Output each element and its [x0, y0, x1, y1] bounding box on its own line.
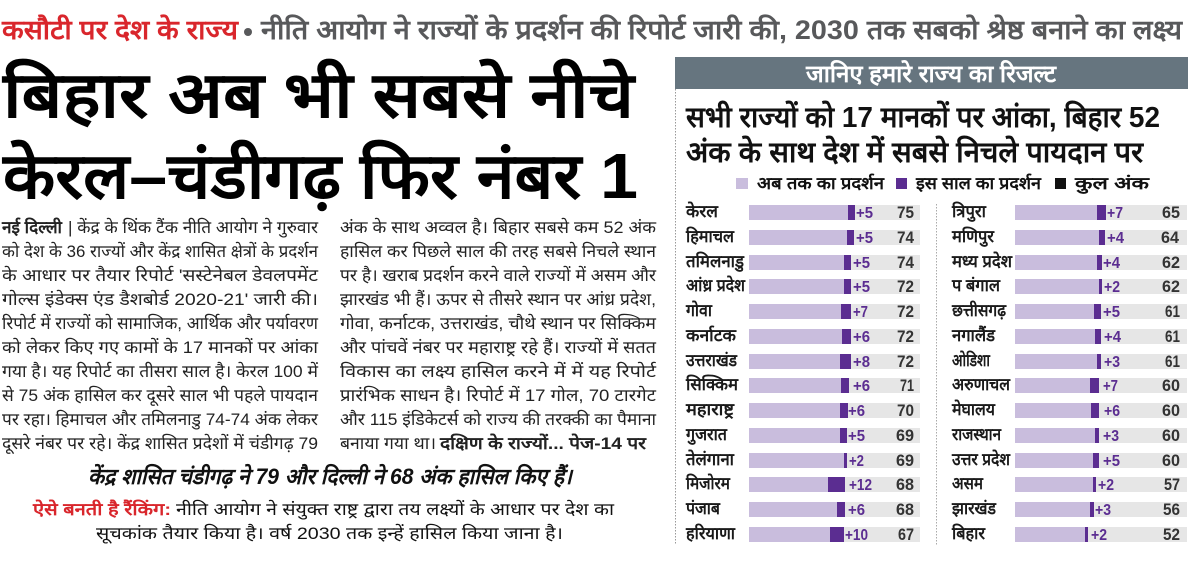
row: Punjab: 68 [896, 501, 914, 519]
panel header: state results: जानिए हमारे राज्य का रिजल्ट [805, 60, 1057, 88]
ranking note: ऐसे बनती है रैंकिंग: [32, 499, 171, 519]
row: Haryana: हरियाणा [685, 523, 736, 543]
row: Jharkhand: 56 [1163, 501, 1180, 519]
row: Andhra Pradesh: आंध्र प्रदेश [686, 275, 746, 295]
row: Maharashtra: महाराष्ट्र [685, 400, 735, 419]
row: Sikkim: सिक्किम [685, 374, 739, 394]
row: Mizoram: +12 [849, 477, 872, 494]
row: Uttar Pradesh: 60 [1162, 452, 1180, 470]
row: Haryana: +10 [845, 527, 868, 544]
row: Goa: 72 [897, 303, 914, 321]
row: Uttar Pradesh [951, 449, 1187, 470]
row: Odisha: 61 [1165, 353, 1180, 371]
panel header: state results [675, 57, 1188, 89]
row: West Bengal: +2 [1104, 279, 1120, 296]
row: Assam [952, 474, 1187, 494]
article body: right column: पर है। खराब प्रदर्शन करने वाले राज्यों में असम और [340, 265, 657, 285]
row: Maharashtra: 70 [897, 402, 914, 420]
article body: right column: दक्षिण के राज्यों... पेज-14 पर [439, 433, 647, 453]
row: Chhattisgarh [951, 300, 1187, 321]
row: Punjab: पंजाब [685, 499, 721, 518]
row: Himachal: हिमाचल [685, 226, 735, 246]
row: Maharashtra: +6 [848, 403, 865, 420]
row: Arunachal: अरुणाचल [952, 375, 1011, 394]
row: Haryana: 67 [898, 526, 914, 544]
article body: left column: से 75 अंक हासिल कर दूसरे साल भी पहले पायदान [2, 385, 319, 406]
article body: left column: रिपोर्ट में राज्यों को सामाजिक, आर्थिक और पर्यावरण [2, 313, 319, 333]
article body: right column: विकास का लक्ष्य हासिल करने में में यह रिपोर्ट [340, 361, 657, 381]
article body: left column: | केंद्र के थिंक टैंक नीति आयोग ने गुरुवार [68, 217, 319, 238]
row: Goa: +7 [853, 304, 868, 321]
row: Uttarakhand: 72 [897, 353, 914, 371]
article body: right column: अंक के साथ अव्वल है। बिहार सबसे कम 52 अंक [340, 217, 657, 237]
row: Assam: असम [952, 474, 984, 493]
row: Tripura: +7 [1107, 205, 1123, 222]
row: Nagaland [951, 325, 1187, 346]
row: Uttarakhand: उत्तराखंड [685, 351, 738, 370]
row: Telangana: तेलंगाना [685, 449, 735, 469]
row: Madhya Pradesh [951, 251, 1187, 272]
row: Gujarat [685, 425, 920, 445]
row: Sikkim: 71 [900, 377, 914, 395]
top strap line: कसौटी पर देश के राज्य [1, 14, 239, 45]
bar chart: right column [951, 201, 1187, 544]
row: Sikkim [685, 374, 920, 395]
legend: अब तक का प्रदर्शन [757, 173, 885, 193]
row: Himachal: 74 [897, 229, 915, 247]
row: Meghalaya [951, 399, 1187, 420]
article body: left column: को देश के 36 राज्यों और केंद्र शासित क्षेत्रों के प्रदर्शन [2, 241, 319, 261]
row: Arunachal [952, 375, 1187, 395]
article body: right column: बनाया गया था। [340, 434, 436, 453]
row: Arunachal: +7 [1103, 378, 1118, 395]
row: Jharkhand: झारखंड [951, 499, 997, 518]
article body: left column: दूसरे नंबर पर रहे। केंद्र शासित प्रदेशों में चंडीगढ़ 79 [2, 433, 318, 454]
row: Chhattisgarh: 61 [1165, 303, 1180, 321]
article body: left column: पर रहा। हिमाचल और तमिलनाडु 74-74 अंक लेकर [2, 409, 319, 430]
row: Uttar Pradesh: +5 [1103, 453, 1120, 470]
ranking note: नीति आयोग ने संयुक्त राष्ट्र द्वारा तय लक्ष्यों के आधार पर देश का [176, 499, 615, 520]
row: Gujarat: 69 [896, 427, 914, 445]
row: Andhra Pradesh: +5 [853, 279, 870, 296]
row: Jharkhand [951, 499, 1187, 519]
row: Sikkim: +6 [853, 378, 870, 395]
row: Mizoram [685, 473, 920, 494]
row: Tripura: त्रिपुरा [951, 201, 987, 222]
row: Gujarat: +5 [848, 428, 865, 445]
row: Manipur [951, 226, 1187, 247]
row: Punjab: +6 [848, 502, 865, 519]
row: Karnataka: 72 [897, 328, 914, 346]
row: Punjab [685, 499, 920, 519]
row: Karnataka: +6 [853, 329, 870, 346]
row: Manipur: +4 [1107, 230, 1124, 247]
row: Tamil Nadu: तमिलनाडु [685, 251, 745, 272]
row: Madhya Pradesh: +4 [1103, 255, 1120, 272]
row: Chhattisgarh: +5 [1103, 304, 1120, 321]
row: Arunachal: 60 [1162, 377, 1180, 395]
row: Kerala [685, 201, 920, 222]
row: Telangana: 69 [896, 452, 914, 470]
row: Manipur: 64 [1161, 229, 1180, 247]
article body: right column: और 115 इंडिकेटर्स को राज्य की तरक्की का पैमाना [340, 409, 657, 429]
row: Bihar: +2 [1091, 527, 1107, 544]
row: Maharashtra [685, 400, 920, 420]
row: Rajasthan: +3 [1103, 428, 1119, 445]
ranking note [32, 499, 615, 544]
row: Telangana: +2 [849, 453, 864, 470]
row: Tamil Nadu: 74 [897, 254, 915, 272]
article body: right column: झारखंड भी हैं। ऊपर से तीसरे स्थान पर आंध्र प्रदेश, [340, 289, 656, 309]
row: Rajasthan: राजस्थान [951, 425, 1001, 444]
row: Tamil Nadu [685, 251, 920, 272]
legend [736, 173, 1150, 194]
row: Goa: गोवा [685, 300, 713, 320]
row: Kerala: +5 [856, 205, 873, 222]
row: Bihar [951, 523, 1187, 544]
row: Uttarakhand [685, 351, 920, 371]
row: Karnataka [685, 325, 920, 346]
row: Gujarat: गुजरात [685, 425, 728, 445]
row: Odisha: +3 [1104, 354, 1120, 371]
article body: left column: के आधार पर तैयार रिपोर्ट 'सस्टेनेबल डेवलपमेंट [2, 265, 318, 285]
row: Madhya Pradesh: 62 [1162, 254, 1180, 272]
row: Tripura: 65 [1162, 204, 1180, 222]
row: West Bengal [951, 276, 1187, 296]
panel title [685, 100, 1160, 169]
article body: right column: हासिल कर पिछले साल की तरह सबसे निचले स्थान [340, 241, 657, 261]
top strap line: नीति आयोग ने राज्यों के प्रदर्शन की रिपोर्ट जारी की, 2030 तक सबको श्रेष्ठ बनाने का लक्ष्य [260, 14, 1183, 45]
row: Tamil Nadu: +5 [853, 255, 870, 272]
row: Nagaland: नगालैंड [951, 325, 996, 345]
row: Odisha [952, 350, 1187, 371]
ranking note: सूचकांक तैयार किया है। वर्ष 2030 तक इन्हें हासिल किया जाना है। [96, 523, 563, 544]
legend: इस साल का प्रदर्शन [915, 173, 1042, 193]
row: Andhra Pradesh [686, 275, 920, 296]
main headline: केरल–चंडीगढ़ फिर नंबर 1 [2, 139, 638, 212]
article body: left column: को लेकर किए गए कामों के 17 मानकों पर आंका [2, 337, 319, 357]
article body: left column: नई दिल्ली [1, 217, 63, 237]
row: Assam: +2 [1098, 477, 1114, 494]
row: Rajasthan [951, 425, 1187, 445]
row: Goa [685, 300, 920, 321]
row: Mizoram: 68 [896, 476, 914, 494]
panel title: अंक के साथ देश में सबसे निचले पायदान पर [686, 135, 1144, 169]
row: West Bengal: प बंगाल [951, 276, 1001, 295]
row: Uttarakhand: +8 [853, 354, 870, 371]
article body: right column: प्रारंभिक साधन है। रिपोर्ट में 17 गोल, 70 टारगेट [340, 385, 656, 405]
row: Meghalaya: मेघालय [951, 399, 996, 419]
row: Himachal [685, 226, 920, 247]
row: Bihar: बिहार [951, 523, 986, 543]
row: Mizoram: मिजोरम [685, 473, 731, 493]
row: Jharkhand: +3 [1095, 502, 1111, 519]
row: Nagaland: 61 [1165, 328, 1180, 346]
row: Odisha: ओडिशा [952, 350, 990, 370]
row: Tripura [951, 201, 1187, 222]
bar chart: left column [685, 201, 920, 544]
row: Karnataka: कर्नाटक [685, 325, 737, 345]
legend: कुल अंक [1074, 174, 1150, 194]
row: Meghalaya: +6 [1104, 403, 1120, 420]
main headline [2, 58, 638, 212]
row: Kerala: 75 [897, 204, 914, 222]
panel title: सभी राज्यों को 17 मानकों पर आंका, बिहार 52 [685, 100, 1160, 134]
highlighted sentence: केंद्र शासित चंडीगढ़ ने 79 और दिल्ली ने 68 अंक हासिल किए हैं। [88, 463, 574, 489]
row: Meghalaya: 60 [1162, 402, 1180, 420]
article body: left column [1, 217, 319, 454]
row: Haryana [685, 523, 920, 544]
row: Rajasthan: 60 [1162, 427, 1180, 445]
row: Telangana [685, 449, 920, 470]
article body: right column: गोवा, कर्नाटक, उत्तराखंड, चौथे स्थान पर सिक्किम [340, 313, 657, 333]
row: Kerala: केरल [685, 201, 719, 221]
row: Himachal: +5 [856, 230, 873, 247]
row: Uttar Pradesh: उत्तर प्रदेश [951, 449, 1011, 469]
article body: right column [340, 217, 657, 453]
main headline: बिहार अब भी सबसे नीचे [2, 58, 637, 131]
article body: right column: और पांचवें नंबर पर महाराष्ट्र रहे हैं। राज्यों में सतत [340, 337, 656, 357]
row: Bihar: 52 [1163, 526, 1180, 544]
row: Chhattisgarh: छत्तीसगढ़ [951, 300, 1007, 320]
row: Assam: 57 [1164, 476, 1180, 494]
row: Andhra Pradesh: 72 [897, 278, 914, 296]
row: West Bengal: 62 [1162, 278, 1180, 296]
row: Madhya Pradesh: मध्य प्रदेश [951, 251, 1013, 271]
article body: left column: गोल्स इंडेक्स एंड डैशबोर्ड 2020-21' जारी की। [2, 289, 318, 309]
row: Nagaland: +4 [1104, 329, 1121, 346]
row: Manipur: मणिपुर [951, 226, 995, 247]
article body: left column: गया है। यह रिपोर्ट का तीसरा साल है। केरल 100 में [2, 361, 319, 381]
